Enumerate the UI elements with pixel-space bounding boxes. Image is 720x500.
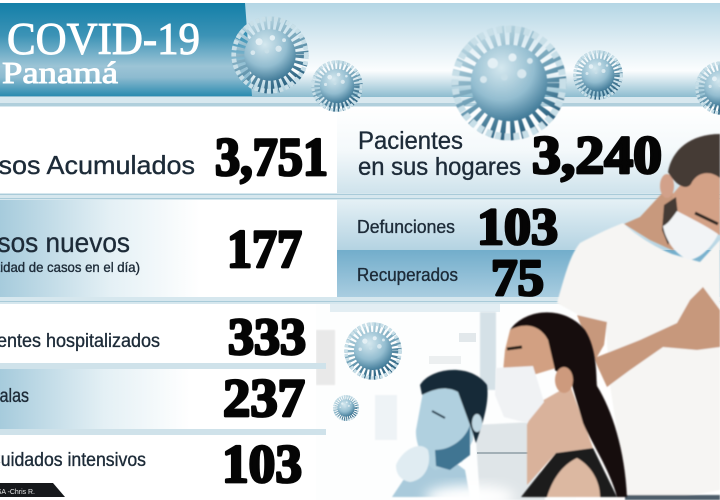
photo: coughing man (392, 370, 515, 500)
cuidados intensivos row (0, 434, 316, 500)
panel: defunciones: Defunciones (357, 217, 455, 237)
mask (495, 366, 544, 423)
arm (577, 287, 720, 387)
glow (425, 485, 515, 500)
black top (521, 448, 617, 497)
icon: virus 7 (334, 396, 358, 420)
beard (662, 197, 678, 245)
panel: casos nuevos: 177 (227, 219, 302, 279)
face (416, 386, 474, 470)
credit tag (0, 483, 65, 497)
panel: casos nuevos (0, 200, 337, 297)
photo: woman with mask (495, 312, 627, 497)
header band (0, 3, 720, 107)
panel: pacientes en sus hogares: 3,240 (532, 125, 662, 185)
hospital room photo (316, 304, 576, 500)
icon: virus 2 (313, 62, 361, 110)
title panel (0, 3, 252, 96)
icon: virus 6 (346, 324, 400, 378)
row separator (0, 363, 326, 369)
cuidados intensivos row: 103 (222, 434, 302, 494)
neck (527, 385, 593, 485)
panel: defunciones (337, 199, 720, 256)
hair (510, 312, 627, 497)
icon: virus 1 (234, 19, 306, 91)
panel: pacientes en sus hogares: Pacientes (358, 127, 463, 155)
hand (396, 446, 429, 482)
hospitalised row: 333 (228, 309, 306, 366)
mask (663, 211, 718, 260)
trousers (625, 495, 720, 500)
panel: casos acumulados: 3,751 (215, 127, 328, 187)
shoulder (547, 458, 600, 497)
eye (695, 213, 718, 224)
ear (660, 174, 674, 198)
t-shirt (557, 223, 720, 496)
photo: man with chest pain (557, 134, 720, 500)
subtitle: Panamá (2, 55, 118, 90)
title: COVID-19 (7, 14, 200, 64)
icon: virus 3 large (455, 29, 563, 137)
hospitalised row (0, 304, 316, 366)
panel: recuperados (337, 250, 720, 307)
panel: recuperados: Recuperados (357, 265, 458, 285)
icon: virus 4 (575, 52, 621, 98)
body (392, 455, 470, 497)
ear (555, 367, 573, 393)
panel: pacientes en sus hogares: en sus hogares (358, 153, 521, 181)
row separator (0, 193, 720, 200)
eye (432, 411, 445, 418)
panel: casos acumulados (0, 107, 337, 193)
salas row (0, 368, 316, 429)
eye (507, 347, 522, 349)
face (672, 172, 720, 235)
hair (420, 370, 488, 443)
panel: recuperados: 75 (491, 250, 544, 307)
hair (668, 134, 720, 187)
face (503, 325, 556, 375)
panel: defunciones: 103 (477, 199, 558, 256)
neck (624, 190, 690, 250)
ear (472, 414, 482, 432)
row separator (0, 297, 720, 304)
icon: virus 5 (697, 63, 720, 113)
salas row: 237 (223, 368, 305, 428)
panel: pacientes en sus hogares (337, 107, 720, 193)
row separator (0, 429, 326, 435)
